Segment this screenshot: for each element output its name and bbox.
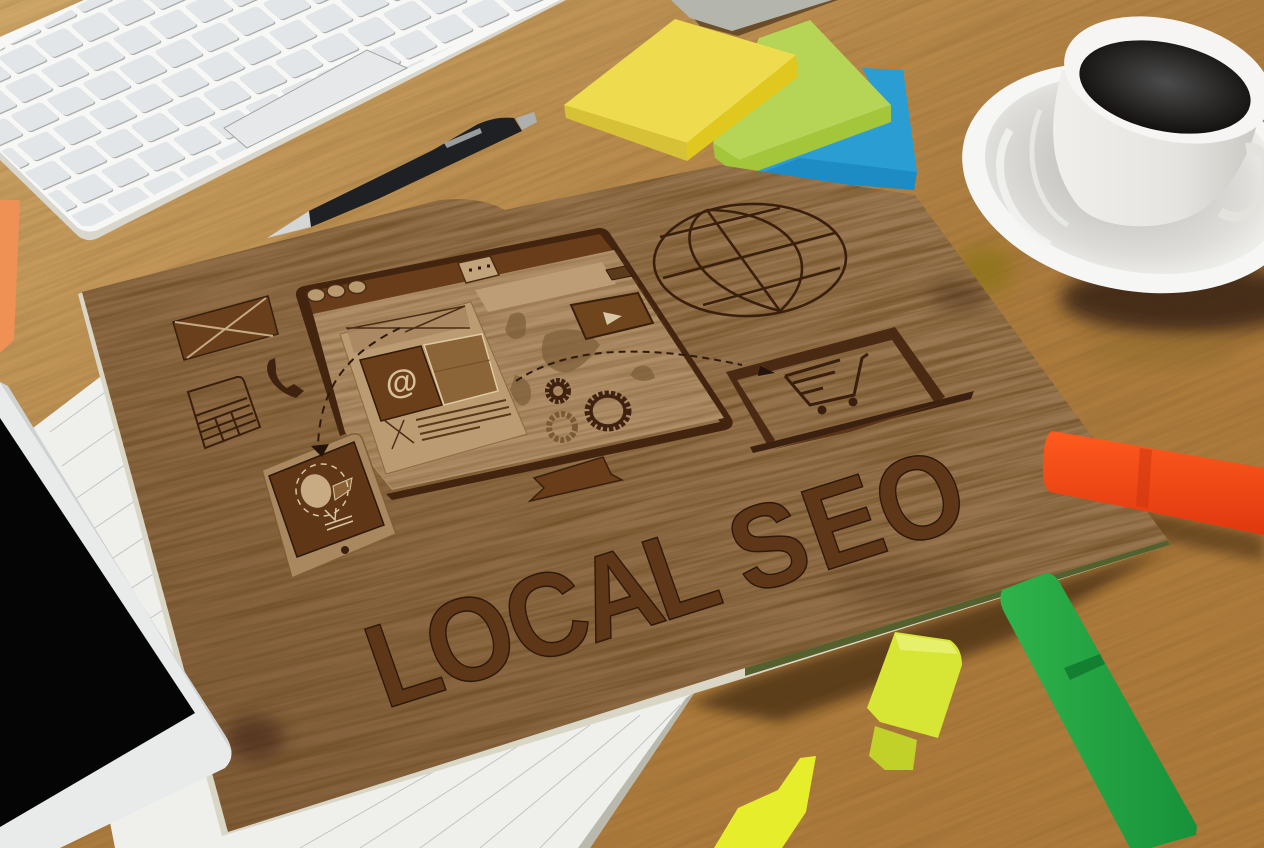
- crossed box: [384, 420, 414, 449]
- page edges: [78, 292, 1170, 836]
- cup body: [1053, 70, 1262, 226]
- title: LOCAL SEO: [350, 423, 983, 734]
- dashed arrow to laptop: [516, 352, 742, 381]
- image tile: [424, 334, 498, 405]
- coffee cup and saucer: [940, 0, 1264, 323]
- orange block at left edge: [0, 200, 20, 353]
- calculator at top edge: [671, 0, 838, 36]
- at sign tile: [360, 346, 442, 421]
- monitor stand: [530, 457, 622, 501]
- notepad under board: [33, 377, 695, 848]
- dashed arrow to tablet: [318, 328, 400, 446]
- cart: [785, 354, 868, 405]
- space bar: [224, 50, 407, 148]
- monitor screen: [313, 250, 724, 490]
- gears: [548, 381, 628, 440]
- video tile: [571, 293, 653, 339]
- icon: envelope: [173, 296, 278, 360]
- content window: @: [383, 361, 420, 402]
- tablet screen: [0, 418, 195, 827]
- laptop base: [750, 391, 974, 453]
- address bar: [475, 262, 616, 312]
- icon: calculator: [188, 377, 260, 448]
- keyboard: [0, 0, 566, 240]
- tablet device: [0, 382, 232, 848]
- green sticky note: [713, 20, 891, 177]
- orange highlighter: [1043, 431, 1264, 535]
- yellow highlighter cap: [867, 632, 962, 770]
- monitor frame: [296, 228, 733, 500]
- icon: browser monitor: [296, 228, 742, 501]
- text lines: [416, 400, 511, 440]
- coffee surface: [1071, 26, 1259, 148]
- icon: tablet: [262, 434, 396, 578]
- content window: [340, 302, 527, 474]
- cup handle: [1220, 148, 1264, 217]
- search icon: [606, 266, 632, 280]
- yellow highlighter: [714, 756, 816, 848]
- tablet screen: [269, 442, 384, 557]
- window dots: [307, 280, 366, 302]
- green highlighter: [1000, 573, 1197, 848]
- tab button: [458, 256, 499, 283]
- brain bulb: [296, 464, 353, 530]
- board shadow: [690, 548, 1172, 722]
- blue sticky note: [741, 68, 917, 190]
- arrow head: [758, 366, 775, 376]
- icon: shopping cart laptop: [726, 327, 974, 453]
- sticky notes: [564, 19, 917, 190]
- icon: telephone handset: [267, 358, 304, 398]
- wooden engraved booklet: [78, 165, 1170, 836]
- world map: [505, 312, 655, 406]
- arrow head: [311, 444, 329, 457]
- icon: globe: [652, 201, 848, 319]
- board surface: [82, 165, 1168, 832]
- yellow sticky note: [564, 19, 798, 161]
- pen: [267, 112, 537, 238]
